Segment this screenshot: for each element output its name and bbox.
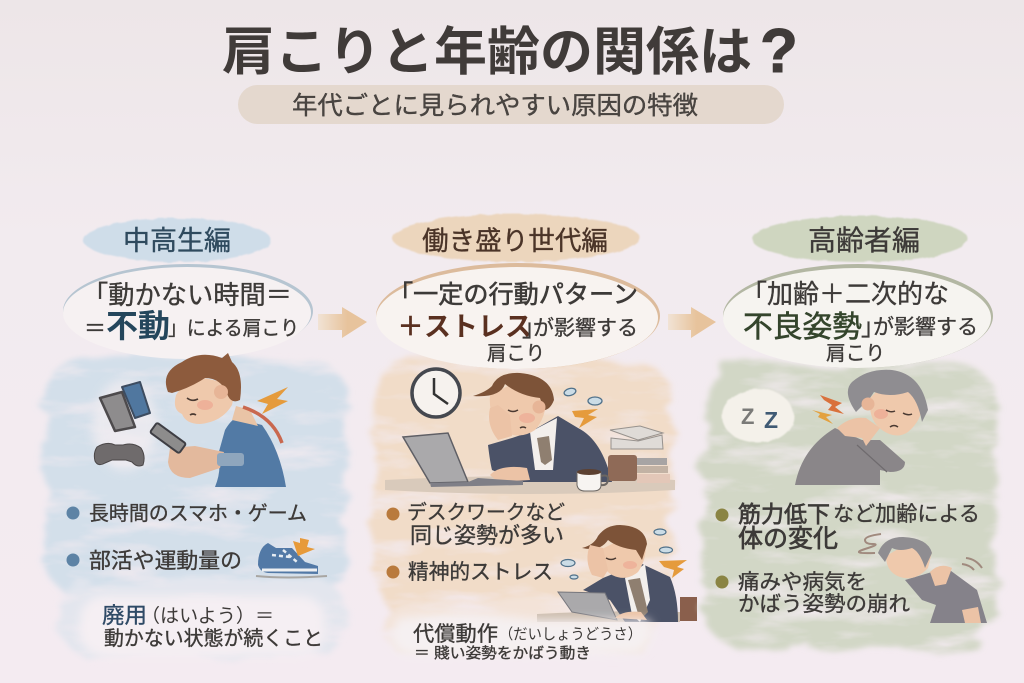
panel background: blue watercolor <box>46 358 346 655</box>
bullet: long smartphone use: 長時間のスマホ・ゲーム <box>89 502 307 525</box>
speech bubble: junior high and high school <box>63 264 313 359</box>
heading pill: working generation <box>392 214 640 262</box>
bullet: desk work: 同じ姿勢が多い <box>410 523 564 548</box>
speech bubble: junior high and high school: ＝ <box>84 316 106 341</box>
bullet: muscle decline <box>716 501 980 553</box>
icon: pain bolt <box>257 387 288 414</box>
icon: pain bolts <box>812 395 844 424</box>
title: 肩こりと年齢の関係は <box>222 24 752 82</box>
speech bubble: junior high and high school: 不動 <box>106 308 170 344</box>
icon: wall clock <box>412 369 460 417</box>
subtitle pill: 年代ごとに見られやすい原因の特徴 <box>292 92 698 120</box>
bullet: muscle decline: 体の変化 <box>738 525 838 553</box>
callout: disuse definition <box>80 596 325 656</box>
icon: coffee cup <box>577 469 608 491</box>
icon: sweat drops <box>563 387 602 405</box>
callout: compensatory movement <box>392 614 651 662</box>
icon: game controller <box>94 443 144 466</box>
bullet: posture breakdown: かばう姿勢の崩れ <box>738 593 910 616</box>
icon: laptop <box>403 433 523 487</box>
illustration: older person holding shoulder <box>795 370 928 485</box>
callout: compensatory movement: ＝ 賤い姿勢をかばう動き <box>414 645 591 662</box>
icon: sneaker with down arrow <box>256 538 327 578</box>
speech bubble: older adults: 不良姿勢 <box>743 311 862 344</box>
bullet: club activity: 部活や運動量の <box>89 549 242 573</box>
callout: compensatory movement: 代償動作 <box>413 623 498 646</box>
panel background: orange watercolor <box>374 358 672 650</box>
bullet: desk work: デスクワークなど <box>407 501 565 524</box>
callout: disuse definition: 動かない状態が続くこと <box>104 627 323 650</box>
callout: disuse definition: （はいよう）＝ <box>141 605 274 627</box>
icon: sweat and bolt <box>561 529 687 579</box>
illustration: worker holding head at laptop <box>537 525 697 622</box>
illustration: boy looking at phone with shoulder pain <box>150 353 286 487</box>
speech bubble: working generation: が影響する <box>533 317 638 340</box>
panel background: green watercolor <box>704 364 996 648</box>
speech bubble: working generation: 「一定の行動パターン <box>388 281 638 309</box>
speech bubble: working generation: ＋ストレス <box>397 312 532 342</box>
speech bubble: junior high and high school: 「動かない時間＝ <box>82 280 292 310</box>
icon: smartphones <box>93 379 157 471</box>
subtitle pill <box>238 85 784 124</box>
bullet: posture breakdown: 痛みや病気を <box>738 571 867 594</box>
arrow: working to older generation <box>668 307 716 338</box>
speech bubble: older adults: 」 <box>861 314 885 341</box>
bullet: muscle decline: など加齢による <box>833 503 980 526</box>
bullet: muscle decline: 筋力低下 <box>738 501 830 527</box>
panel: older adults <box>704 216 996 648</box>
heading pill: junior high and high school: 中高生編 <box>123 226 231 256</box>
bullet: posture breakdown <box>716 571 910 616</box>
speech bubble: working generation <box>376 263 660 369</box>
icon: sleep bubble: Z <box>741 404 754 429</box>
callout: disuse definition: 廃用 <box>102 603 147 628</box>
heading pill: older adults <box>752 216 968 262</box>
speech bubble: older adults: 「加齢＋二次的な <box>741 279 949 309</box>
speech bubble: working generation: 」 <box>522 315 546 342</box>
speech bubble: working generation: 肩こり <box>487 343 545 365</box>
speech bubble: junior high and high school: 」による肩こり <box>168 318 299 340</box>
icon: sleep bubble <box>722 389 794 443</box>
speech bubble: older adults: が影響する <box>873 316 978 339</box>
illustration: office worker at laptop <box>385 373 675 494</box>
bullet: desk work <box>386 501 565 548</box>
arrow: junior to working generation <box>318 307 367 338</box>
callout: compensatory movement: （だいしょうどうさ） <box>499 626 642 643</box>
speech bubble: older adults: 肩こり <box>826 343 885 365</box>
panel: working generation <box>374 214 697 662</box>
speech bubble: older adults <box>723 264 993 368</box>
icon: stress bolt <box>572 409 598 428</box>
heading pill: older adults: 高齢者編 <box>808 225 920 256</box>
bullet: mental stress: 精神的ストレス <box>408 561 553 584</box>
illustration: stooped older person <box>859 534 987 623</box>
panel: junior high and high school students <box>46 218 346 656</box>
heading pill: junior high and high school <box>83 218 271 262</box>
icon: papers and books <box>608 426 670 483</box>
title: ? <box>760 17 798 86</box>
heading pill: working generation: 働き盛り世代編 <box>422 226 608 256</box>
icon: neck pain arc <box>243 407 282 443</box>
icon: sleep bubble: Z <box>764 407 778 433</box>
